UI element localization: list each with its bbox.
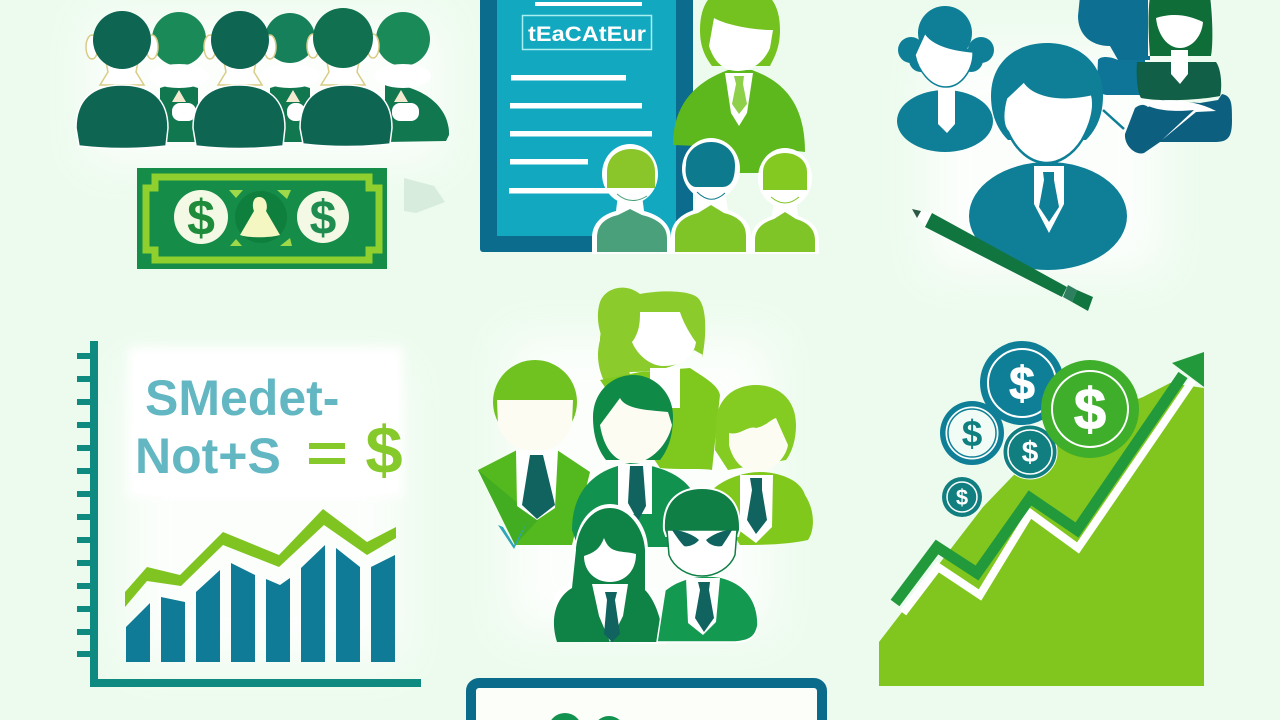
icon: student three [751, 148, 819, 254]
icon: coin tiny: $ [956, 485, 968, 510]
formula text: SMedet- [145, 370, 339, 426]
icon: man with sunglasses [657, 488, 758, 642]
icon: coin large green [1041, 360, 1139, 458]
icon: man left [478, 360, 590, 549]
icon: coin large teal [980, 341, 1064, 425]
area chart [879, 383, 1204, 686]
document heading [522, 16, 652, 50]
icon: dollar sign right: $ [310, 192, 337, 245]
icon: student two [671, 138, 751, 254]
icon: woman back [598, 288, 720, 470]
document heading: tEaCAtEur [528, 23, 646, 46]
icon: woman left [897, 6, 994, 152]
icon: people heads in monitor [548, 713, 625, 720]
chart axes [77, 341, 421, 687]
icon: man centre [572, 375, 690, 547]
formula text [135, 370, 403, 488]
panel: monitor frame [471, 683, 822, 720]
icon: coin large green: $ [1074, 377, 1106, 442]
formula text: $ [365, 413, 403, 488]
icon: coin left [940, 401, 1004, 465]
trend line [125, 509, 396, 607]
icon: pencil [912, 209, 1093, 311]
panel: team of people [478, 288, 813, 644]
document text lines [509, 75, 652, 194]
panel: group of people with banknote [76, 8, 449, 269]
icon: front row people [76, 8, 392, 148]
clipboard board [480, 0, 693, 252]
clipboard sheet [497, 0, 676, 236]
icon: coin tiny [942, 477, 982, 517]
panel: rising chart with coins [879, 341, 1204, 686]
icon: coin left: $ [962, 413, 983, 454]
icon: man right [712, 385, 813, 545]
icon: woman front [554, 504, 666, 644]
icon: back row people [149, 12, 449, 142]
formula text: Not+S [135, 428, 281, 484]
icon: man centre [969, 43, 1127, 270]
panel: bar chart with formula [77, 341, 421, 687]
icon: coin small centre [1003, 425, 1057, 479]
icon: coin small centre: $ [1022, 436, 1039, 469]
trend arrow [895, 352, 1204, 613]
icon: banknote [137, 168, 387, 269]
icon: coin large teal: $ [1009, 357, 1035, 409]
icon: group right [1078, 0, 1232, 154]
panel: staff group with pencil [897, 0, 1232, 311]
icon: teacher [673, 0, 805, 173]
panel: clipboard with teacher and students [480, 0, 819, 254]
icon: student one [592, 144, 671, 254]
icon: dollar sign left: $ [187, 190, 215, 246]
bar chart [126, 545, 395, 662]
